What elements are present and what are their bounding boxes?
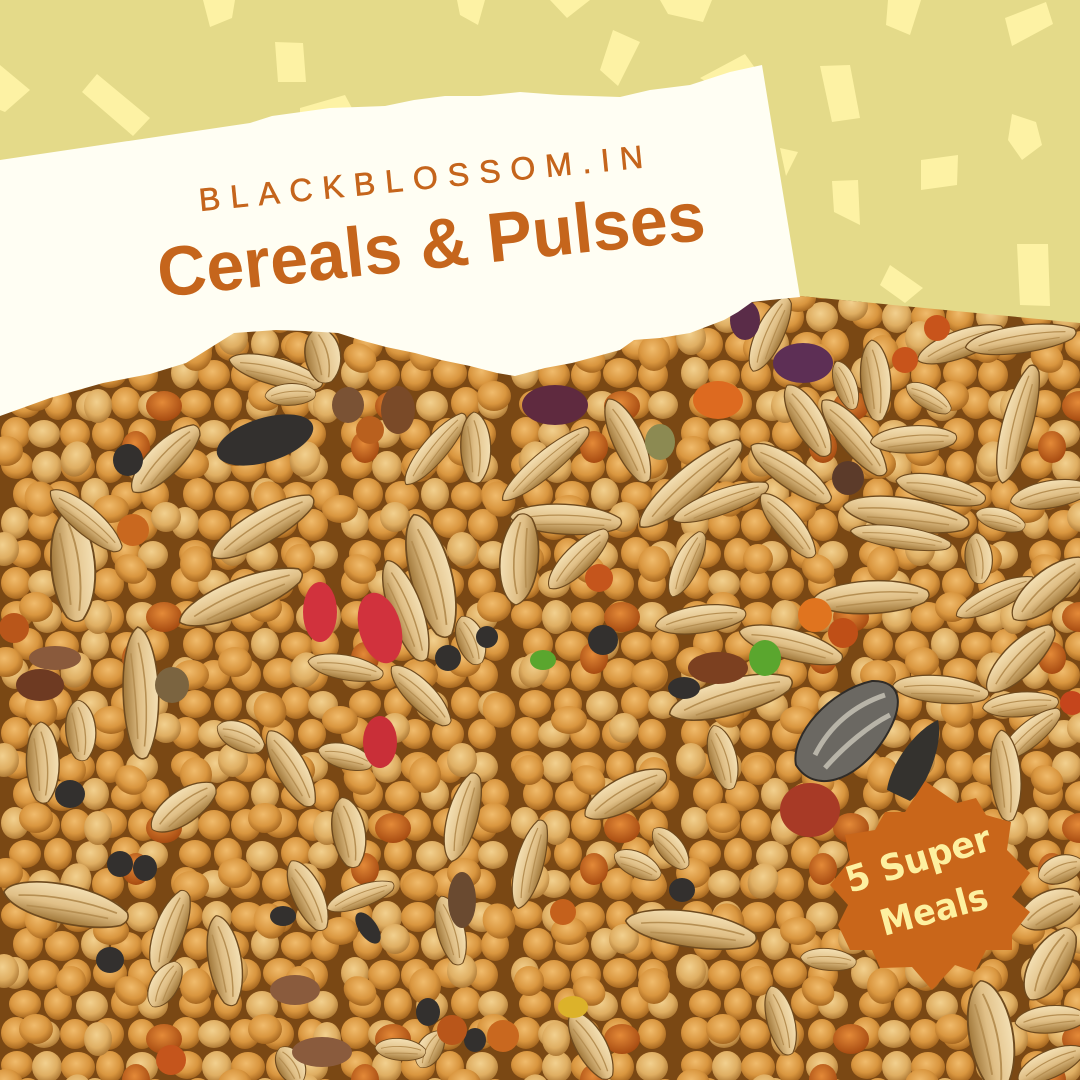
starburst <box>830 781 1030 990</box>
badge text: 5 Super <box>841 818 996 902</box>
seed bed overlay <box>0 290 1080 1080</box>
dark seeds <box>55 404 700 1052</box>
badge: 5 Super Meals <box>830 781 1030 990</box>
torn paper strip <box>0 65 800 416</box>
confetti pattern <box>0 0 1053 306</box>
title: Cereals & Pulses <box>153 177 709 312</box>
seed bed <box>0 290 1080 1080</box>
oat kernels <box>0 292 1080 1080</box>
grain photo area <box>0 290 1080 1080</box>
badge text <box>841 818 996 945</box>
coloured pellets <box>303 300 840 1018</box>
paper heading: site name: BLACKBLOSSOM.IN <box>197 139 645 218</box>
brown and orange seeds <box>0 315 1080 1075</box>
sunflower seeds <box>795 681 939 801</box>
badge text: Meals <box>876 877 993 945</box>
